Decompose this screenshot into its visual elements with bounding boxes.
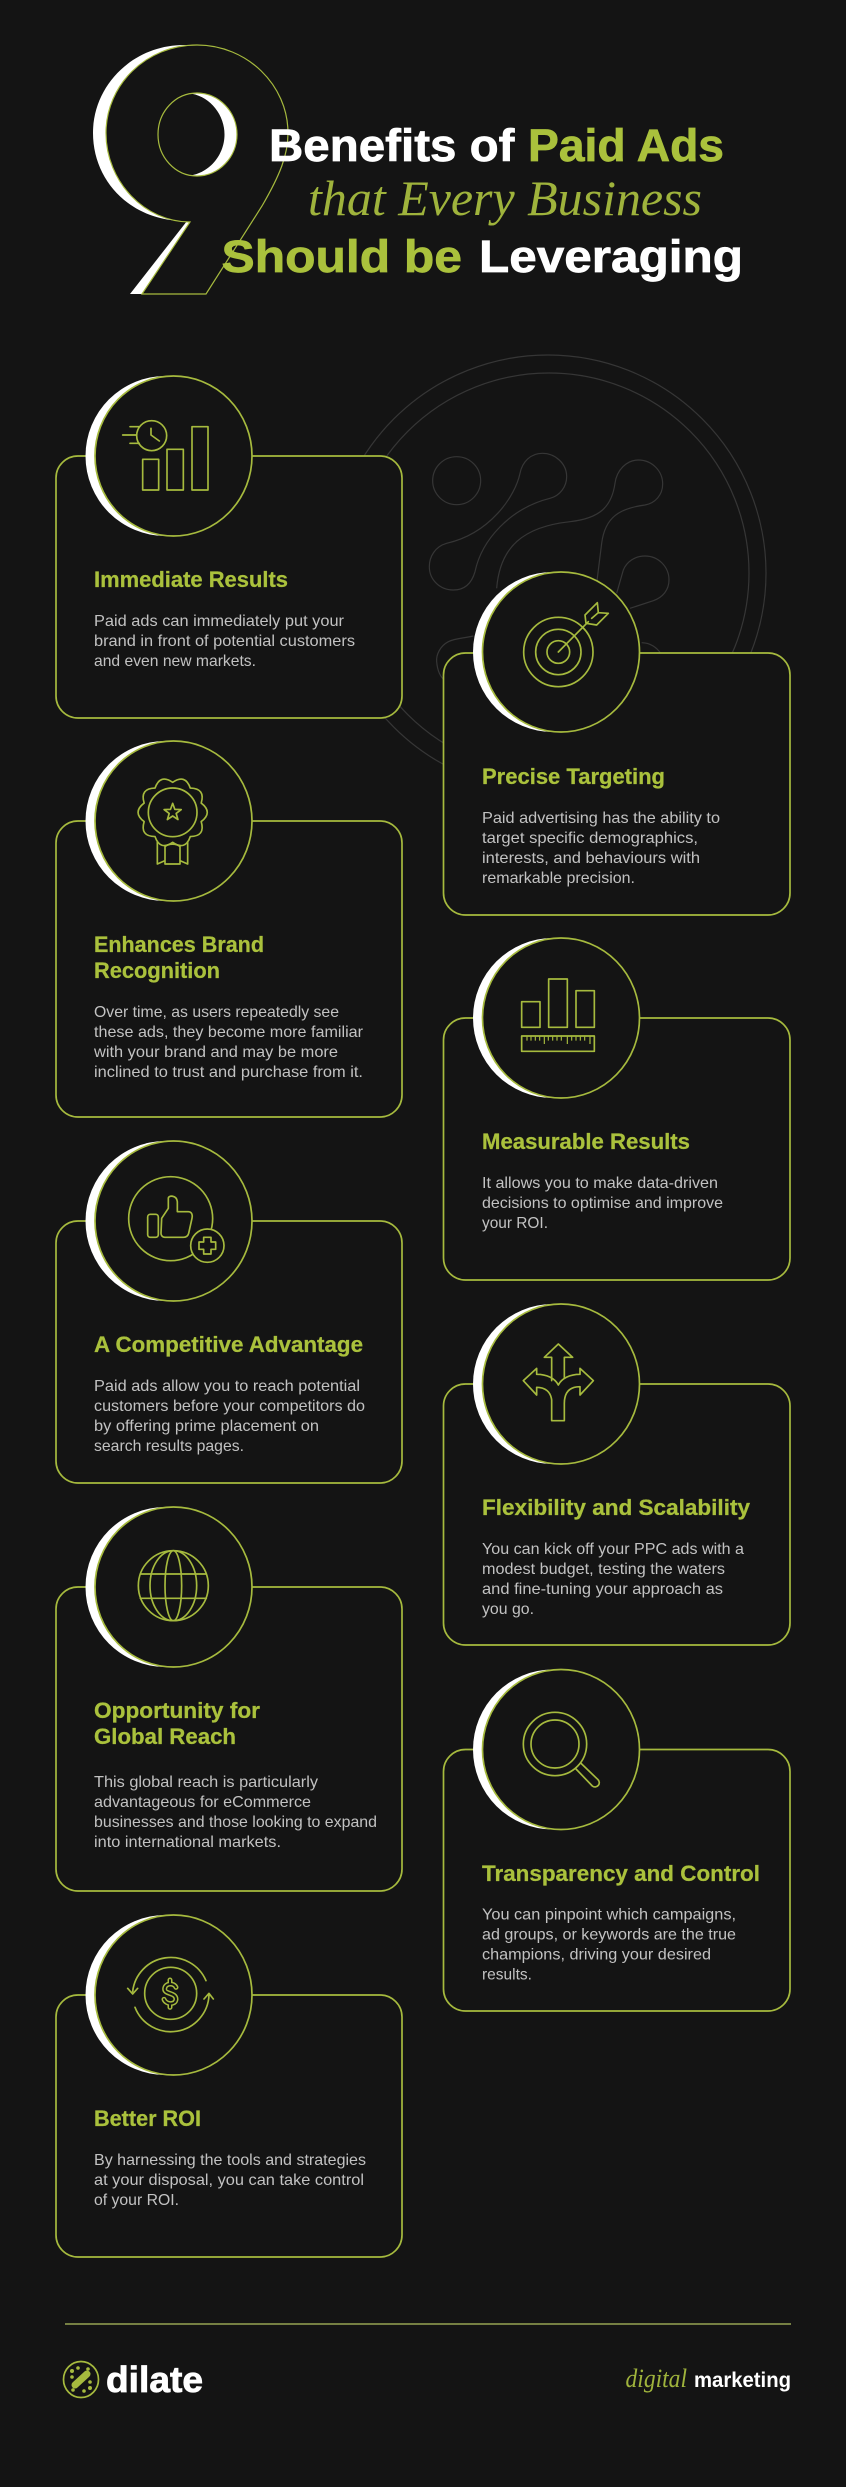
panel: Better ROI <box>56 1915 402 2257</box>
body text: champions, driving your desired <box>482 1946 711 1964</box>
body text <box>482 1541 744 1618</box>
icon: award badge with star <box>138 779 207 864</box>
body text <box>94 613 355 670</box>
body text: your ROI. <box>482 1215 548 1232</box>
heading: Global Reach <box>94 1724 236 1749</box>
heading: Immediate Results <box>94 567 288 592</box>
panel: Opportunity for Global Reach <box>56 1507 402 1891</box>
title <box>222 120 743 282</box>
panel: A Competitive Advantage <box>56 1141 402 1483</box>
title: Benefits of <box>269 120 516 171</box>
heading: Recognition <box>94 958 220 983</box>
body text: Paid advertising has the ability to <box>482 810 720 827</box>
icon: globe <box>138 1551 208 1621</box>
body text: You can kick off your PPC ads with a <box>482 1541 744 1558</box>
body text <box>94 1378 365 1455</box>
icon: dollar with cycle arrows <box>128 1957 213 2032</box>
heading <box>94 932 264 983</box>
body text: these ads, they become more familiar <box>94 1024 364 1041</box>
body text: You can pinpoint which campaigns, <box>482 1906 736 1924</box>
body text: remarkable precision. <box>482 870 635 887</box>
body text: businesses and those looking to expand <box>94 1814 377 1831</box>
body text: target specific demographics, <box>482 830 698 847</box>
body text <box>94 2152 366 2209</box>
body text: of your ROI. <box>94 2192 179 2209</box>
icon: clock and rising bars <box>123 421 208 490</box>
body text: by offering prime placement on <box>94 1418 319 1435</box>
background decoration: concentric circles and network blobs <box>330 355 766 791</box>
body text: This global reach is particularly <box>94 1774 318 1791</box>
body text: and fine-tuning your approach as <box>482 1581 723 1598</box>
body text: and even new markets. <box>94 653 256 670</box>
title: Paid Ads <box>528 120 724 171</box>
panel: Immediate Results <box>56 376 402 718</box>
heading: Enhances Brand <box>94 932 264 957</box>
body text: inclined to trust and purchase from it. <box>94 1064 363 1081</box>
body text <box>482 1906 736 1984</box>
footer logo: dilate <box>64 2359 203 2400</box>
panel: Measurable Results <box>444 938 790 1280</box>
body text: brand in front of potential customers <box>94 633 355 650</box>
footer tagline: digital marketing: digital <box>626 2364 687 2393</box>
heading: Transparency and Control <box>482 1861 760 1886</box>
body text: Paid ads allow you to reach potential <box>94 1378 360 1395</box>
icon: magnifying glass <box>523 1712 599 1787</box>
body text: ad groups, or keywords are the true <box>482 1926 736 1944</box>
title: that Every Business <box>308 170 702 226</box>
body text: Paid ads can immediately put your <box>94 613 345 630</box>
footer logo: dilate: dilate <box>106 2359 203 2400</box>
body text: search results pages. <box>94 1438 244 1455</box>
icon: three-way arrows <box>523 1344 593 1421</box>
body text: modest budget, testing the waters <box>482 1561 725 1578</box>
body text: at your disposal, you can take control <box>94 2172 364 2189</box>
icon: bars and ruler <box>522 979 594 1051</box>
heading: Measurable Results <box>482 1129 690 1154</box>
heading: Precise Targeting <box>482 764 665 789</box>
body text <box>93 1004 364 1081</box>
footer tagline: digital marketing: marketing <box>694 2369 791 2392</box>
heading: A Competitive Advantage <box>94 1332 363 1357</box>
panel: Flexibility and Scalability <box>444 1304 790 1645</box>
big outlined number 9 <box>93 45 288 294</box>
body text: Over time, as users repeatedly see <box>94 1004 339 1021</box>
body text: interests, and behaviours with <box>482 850 700 867</box>
body text: It allows you to make data-driven <box>482 1175 718 1192</box>
body text <box>482 810 720 887</box>
footer tagline: digital marketing <box>626 2364 791 2393</box>
body text: advantageous for eCommerce <box>94 1794 311 1811</box>
heading: Better ROI <box>94 2106 201 2131</box>
title: Leveraging <box>479 231 743 282</box>
panel: Transparency and Control <box>444 1670 790 2011</box>
body text: into international markets. <box>94 1834 281 1851</box>
heading: Flexibility and Scalability <box>482 1495 751 1520</box>
icon: target with arrow <box>524 603 608 687</box>
panel: Precise Targeting <box>444 572 790 915</box>
icon: dilate mark <box>64 2362 98 2398</box>
body text: customers before your competitors do <box>94 1398 365 1415</box>
icon: thumbs up with plus <box>129 1177 224 1262</box>
body text: decisions to optimise and improve <box>482 1195 723 1212</box>
title: Should be <box>222 231 462 282</box>
body text: By harnessing the tools and strategies <box>94 2152 366 2169</box>
heading <box>94 1698 260 1749</box>
body text: you go. <box>482 1601 534 1618</box>
body text <box>94 1774 377 1851</box>
body text: with your brand and may be more <box>93 1044 338 1061</box>
body text: results. <box>482 1966 532 1984</box>
heading: Opportunity for <box>94 1698 260 1723</box>
panel: Enhances Brand Recognition <box>56 741 402 1117</box>
body text <box>482 1175 723 1232</box>
